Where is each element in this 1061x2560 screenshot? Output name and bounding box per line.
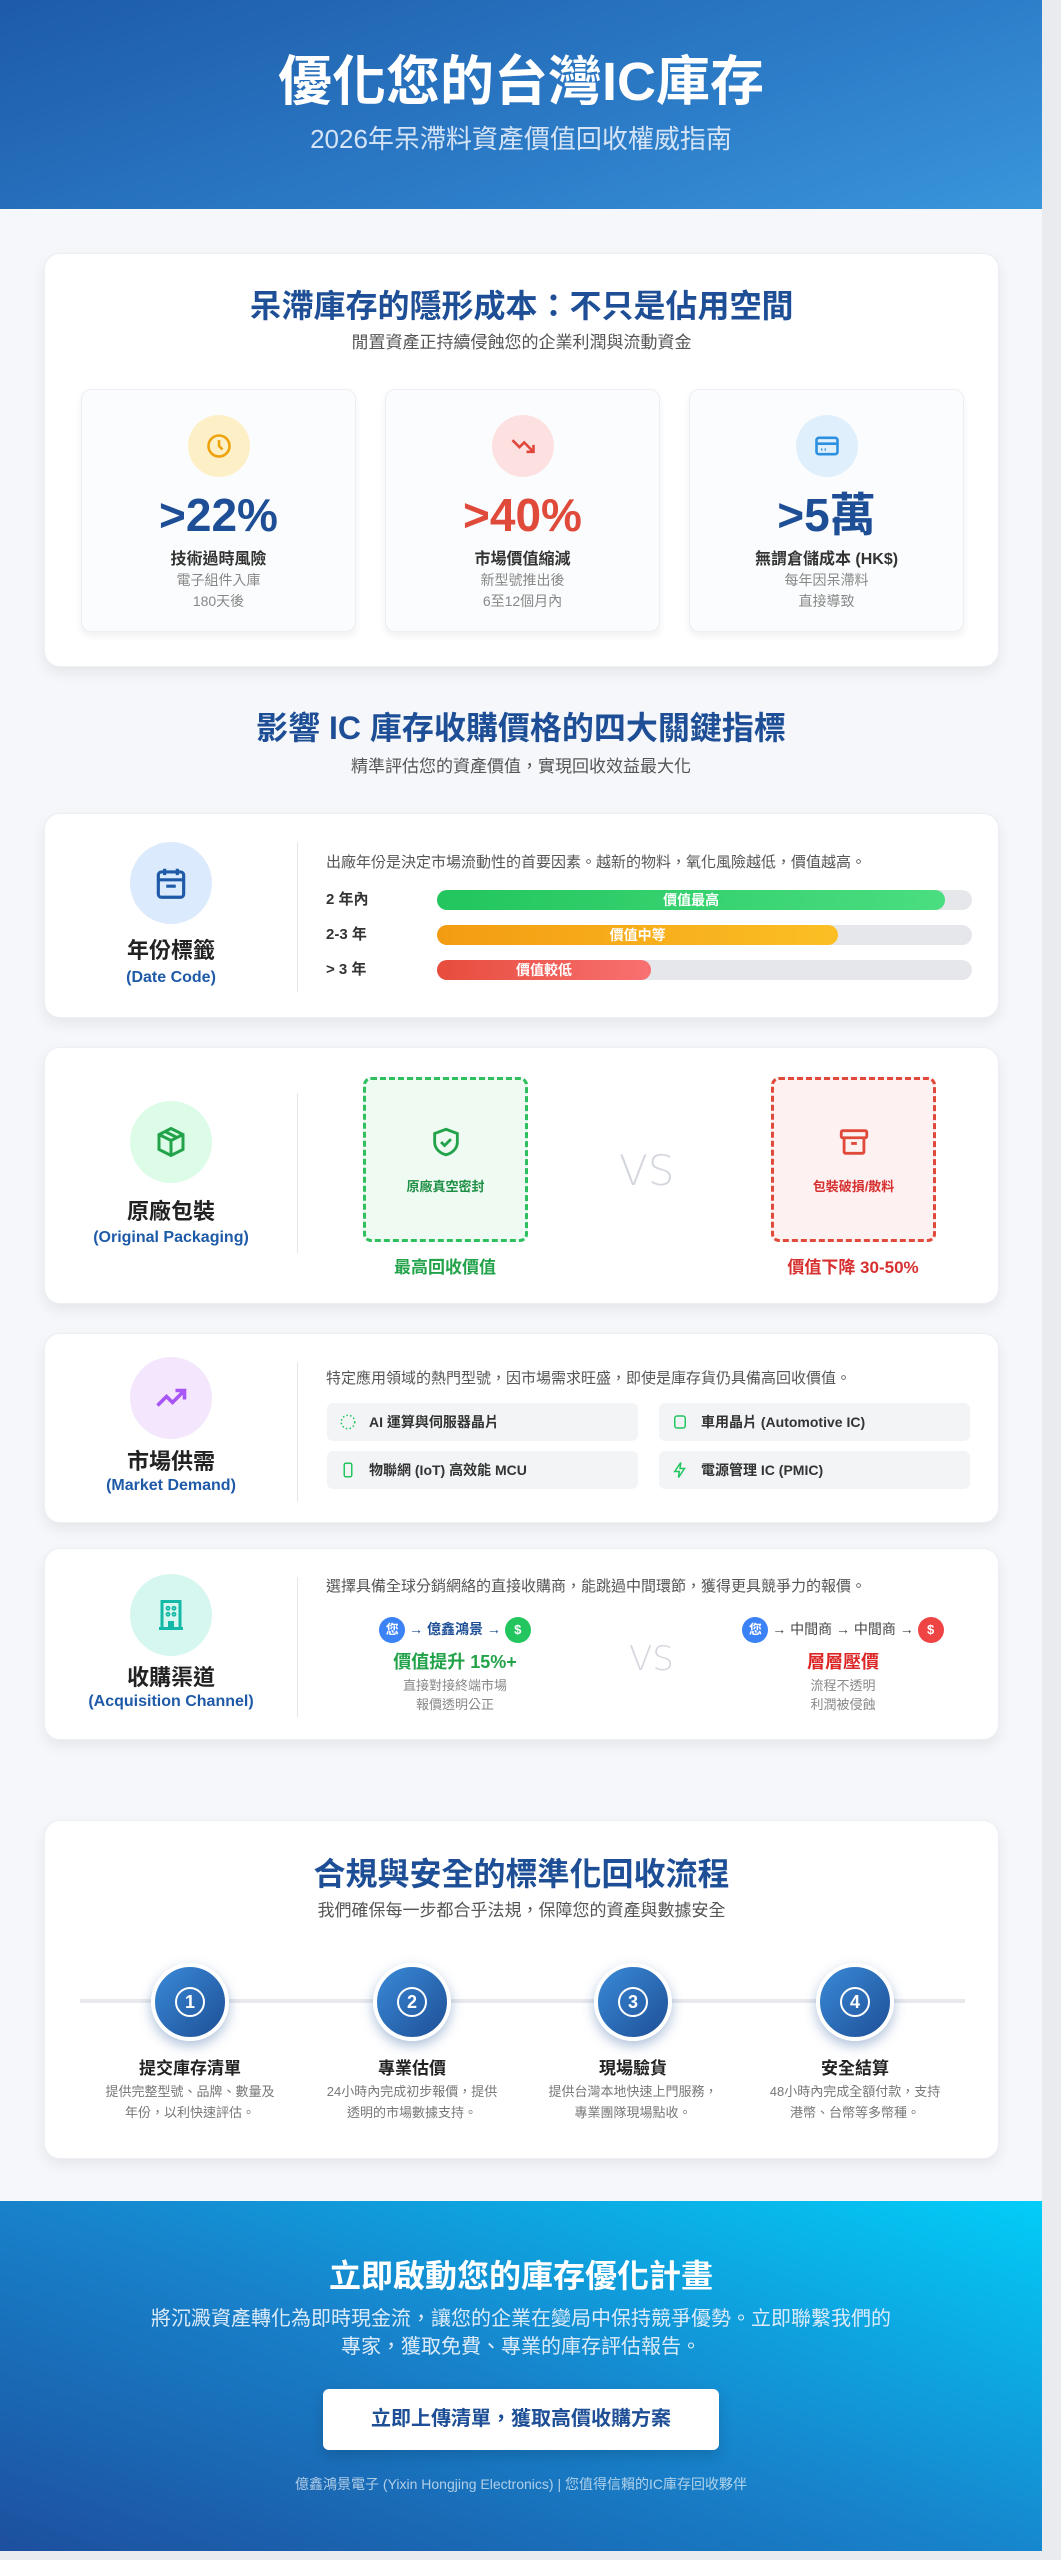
panel: market demand: 市場供需 [127, 1449, 215, 1474]
panel: original packaging: VS [619, 1146, 674, 1195]
subheading: 閒置資產正持續侵蝕您的企業利潤與流動資金 [352, 333, 692, 352]
panel: original packaging: 原廠包裝 [127, 1199, 215, 1224]
stat card: obsolescence: 技術過時風險 [170, 551, 266, 568]
footer: 億鑫鴻景電子 (Yixin Hongjing Electronics) | 您值得信賴的IC庫存回收夥伴 [295, 2476, 747, 2492]
icon: calendar [130, 842, 212, 924]
step 1: 1 [185, 1992, 195, 2012]
flow: middlemen: → 中間商 → 中間商 → [772, 1621, 914, 1637]
CTA text: 專家，獲取免費、專業的庫存評估報告。 [341, 2336, 701, 2358]
heading: four key indicators [256, 710, 786, 776]
step 1: 年份，以利快速評估。 [125, 2105, 255, 2120]
CTA button: 立即上傳清單，獲取高價收購方案 [371, 2408, 671, 2430]
panel: acquisition channel: VS [629, 1639, 674, 1679]
chip: PMIC [659, 1451, 970, 1489]
chip: automotive: 車用晶片 (Automotive IC) [701, 1414, 865, 1430]
heading: four key indicators: 影響 IC 庫存收購價格的四大關鍵指標 [256, 710, 786, 746]
panel: acquisition channel [44, 1548, 999, 1740]
step 3 [548, 1961, 718, 2120]
flow: direct: 直接對接終端市場 [403, 1678, 507, 1693]
text: date description: 出廠年份是決定市場流動性的首要因素。越新的物料，氧化風險越低，價值越高。 [326, 854, 866, 871]
CTA button [323, 2389, 719, 2450]
step 4: 港幣、台幣等多幣種。 [790, 2105, 920, 2120]
panel: date code: (Date Code) [126, 969, 216, 986]
bar chart: age value: 價值中等 [610, 927, 666, 943]
box: damaged: 包裝破損/散料 [813, 1179, 894, 1194]
flow: direct: 您 [386, 1622, 399, 1637]
step 4: 48小時內完成全額付款，支持 [770, 2084, 940, 2099]
CTA text [151, 2308, 891, 2358]
panel: process [44, 1820, 999, 2159]
box: sealed [363, 1077, 528, 1242]
flow: middlemen [742, 1617, 944, 1712]
step 2: 24小時內完成初步報價，提供 [327, 2084, 497, 2099]
panel: original packaging [44, 1047, 999, 1304]
box: sealed: 原廠真空密封 [406, 1179, 484, 1194]
icon: clock [188, 415, 250, 477]
chip: IoT: 物聯網 (IoT) 高效能 MCU [369, 1462, 527, 1478]
icon: trend up [130, 1357, 212, 1439]
bar chart: age value: 價值最高 [663, 892, 719, 908]
heading: four key indicators: 精準評估您的資產價值，實現回收效益最大化 [351, 757, 691, 776]
step 3: 專業團隊現場點收。 [574, 2105, 692, 2120]
flow: direct: 報價透明公正 [416, 1697, 494, 1712]
chip: IoT [327, 1451, 638, 1489]
label: value drop: 價值下降 30-50% [787, 1258, 919, 1277]
flow: middlemen: 層層壓價 [807, 1652, 879, 1672]
stat card: obsolescence: 電子組件入庫 [176, 572, 260, 588]
label: highest value: 最高回收價值 [394, 1258, 496, 1277]
flow: direct: 價值提升 15%+ [393, 1652, 517, 1672]
chip: automotive [659, 1403, 970, 1441]
icon: building [130, 1574, 212, 1656]
panel: acquisition channel: (Acquisition Channel) [88, 1693, 254, 1710]
panel: market demand [44, 1333, 999, 1523]
flow: middlemen: 利潤被侵蝕 [810, 1697, 876, 1712]
stat card: storage cost: >5萬 [777, 489, 876, 541]
stat card: obsolescence [81, 389, 356, 632]
panel: hidden costs [44, 253, 999, 667]
header banner [0, 0, 1042, 209]
icon: card [796, 415, 858, 477]
step 2: 透明的市場數據支持。 [347, 2105, 477, 2120]
step 3: 3 [628, 1992, 638, 2012]
stat card: storage cost: 直接導致 [798, 593, 854, 609]
CTA title: 立即啟動您的庫存優化計畫 [329, 2258, 713, 2294]
CTA section [0, 2201, 1042, 2551]
title: 優化您的台灣IC庫存 [278, 52, 764, 112]
flow: middlemen: 流程不透明 [810, 1678, 876, 1693]
flow: direct: → 億鑫鴻景 → [409, 1621, 501, 1637]
step 3: 現場驗貨 [599, 2059, 667, 2078]
panel: date code: 年份標籤 [127, 938, 215, 963]
bar chart: age value: > 3 年 [326, 961, 366, 978]
bar chart: age value: 2 年內 [326, 891, 369, 908]
text: channel description: 選擇具備全球分銷網絡的直接收購商，能跳過中間環節，獲得更具競爭力的報價。 [326, 1578, 866, 1595]
icon: down trend [492, 415, 554, 477]
stat card: obsolescence: 180天後 [193, 593, 244, 609]
bar chart: age value: 2-3 年 [326, 926, 367, 943]
step 2: 2 [407, 1992, 417, 2012]
stat card: storage cost: 每年因呆滯料 [784, 572, 868, 588]
panel: market demand: (Market Demand) [106, 1477, 236, 1494]
flow: direct [379, 1617, 531, 1712]
chip: PMIC: 電源管理 IC (PMIC) [701, 1462, 823, 1478]
stat card: storage cost: 無謂倉儲成本 (HK$) [755, 551, 898, 568]
bar chart: age value: 價值較低 [516, 962, 572, 978]
text: demand description: 特定應用領域的熱門型號，因市場需求旺盛，即使是庫存貨仍具備高回收價值。 [326, 1370, 851, 1387]
step 1: 提交庫存清單 [139, 2059, 241, 2078]
step 4 [770, 1961, 940, 2120]
panel: acquisition channel: 收購渠道 [127, 1665, 215, 1690]
step 4: 安全結算 [821, 2059, 889, 2078]
icon: box [130, 1101, 212, 1183]
step 1 [105, 1961, 274, 2120]
flow: direct: $ [514, 1622, 521, 1637]
panel: date code [44, 813, 999, 1018]
panel: process: 我們確保每一步都合乎法規，保障您的資產與數據安全 [318, 1901, 726, 1920]
step 3: 提供台灣本地快速上門服務， [548, 2084, 718, 2099]
flow: middlemen: $ [927, 1622, 934, 1637]
box: damaged [771, 1077, 936, 1242]
stat card: obsolescence: >22% [159, 489, 278, 541]
step 1: 提供完整型號、品牌、數量及 [105, 2084, 274, 2099]
stat card: storage cost [689, 389, 964, 632]
heading: process: 合規與安全的標準化回收流程 [313, 1856, 730, 1892]
flow: middlemen: 您 [749, 1622, 762, 1637]
step 2 [327, 1961, 497, 2120]
stat card: value shrink: >40% [463, 489, 582, 541]
CTA text: 將沉澱資產轉化為即時現金流，讓您的企業在變局中保持競爭優勢。立即聯繫我們的 [151, 2308, 891, 2330]
subtitle: 2026年呆滯料資產價值回收權威指南 [310, 124, 732, 154]
bar chart: age value [326, 890, 972, 980]
stat card: value shrink: 新型號推出後 [480, 572, 564, 588]
step 2: 專業估價 [378, 2059, 446, 2078]
step 4: 4 [850, 1992, 860, 2012]
chip: AI [327, 1403, 638, 1441]
chip: AI: AI 運算與伺服器晶片 [369, 1414, 499, 1430]
stat card: value shrink: 市場價值縮減 [474, 551, 570, 568]
stat card: value shrink [385, 389, 660, 632]
panel: original packaging: (Original Packaging) [93, 1229, 249, 1246]
heading: hidden costs: 呆滯庫存的隱形成本：不只是佔用空間 [249, 288, 794, 324]
stat card: value shrink: 6至12個月內 [483, 593, 562, 609]
